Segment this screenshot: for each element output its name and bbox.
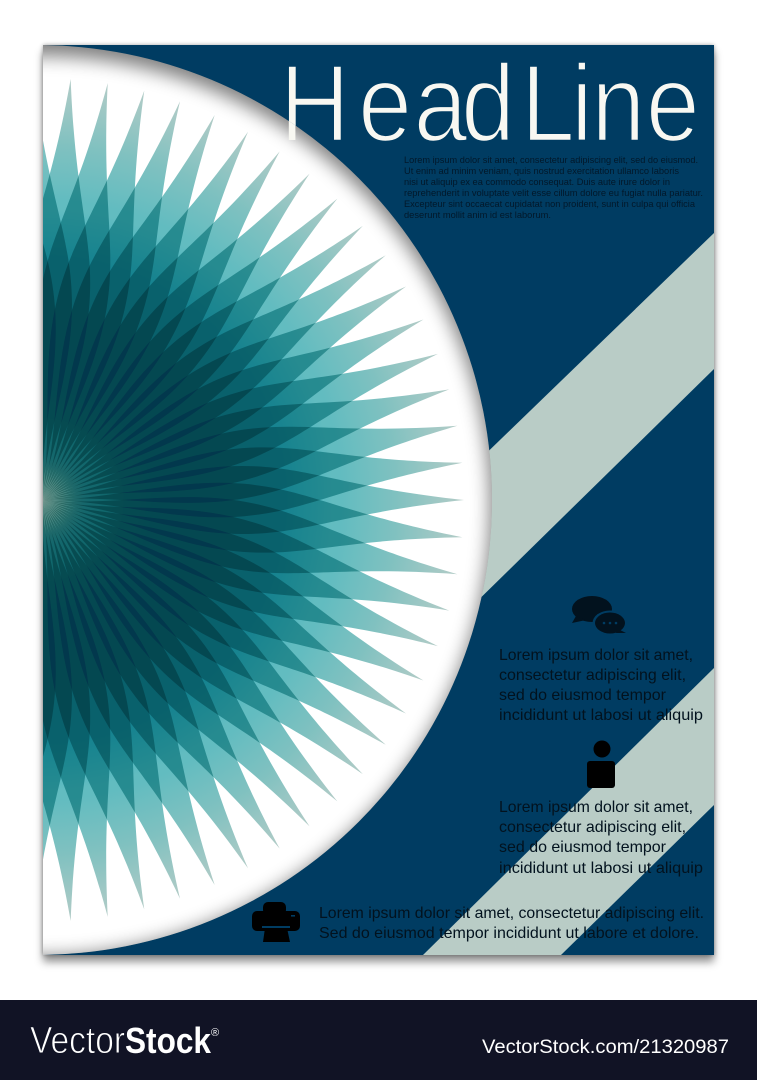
intro paragraph bbox=[404, 155, 703, 221]
text block: bottom feature: Sed do eiusmod tempor incididunt ut labore et dolore. bbox=[319, 925, 699, 942]
footer image id: VectorStock.com/21320987 bbox=[482, 1036, 729, 1058]
footer logo: Stock bbox=[125, 1020, 212, 1061]
text block: first feature bbox=[499, 647, 703, 724]
footer logo: ® bbox=[211, 1027, 219, 1039]
text block: bottom feature bbox=[319, 905, 704, 942]
intro paragraph: Lorem ipsum dolor sit amet, consectetur adipiscing elit, sed do eiusmod. bbox=[404, 155, 698, 166]
title bbox=[286, 62, 694, 141]
text block: second feature: sed do eiusmod tempor bbox=[499, 839, 667, 856]
text block: first feature: incididunt ut labosi ut aliquip bbox=[499, 707, 703, 724]
intro paragraph: reprehenderit in voluptate velit esse cillum dolore eu fugiat nulla pariatur. bbox=[404, 188, 703, 199]
text block: bottom feature: Lorem ipsum dolor sit amet, consectetur adipiscing elit. bbox=[319, 905, 704, 922]
text block: second feature: consectetur adipiscing elit, bbox=[499, 819, 686, 836]
text block: first feature: Lorem ipsum dolor sit amet, bbox=[499, 647, 693, 664]
icon: person bbox=[587, 740, 615, 788]
text block: second feature: Lorem ipsum dolor sit amet, bbox=[499, 799, 693, 816]
text block: first feature: sed do eiusmod tempor bbox=[499, 687, 667, 704]
text block: second feature: incididunt ut labosi ut aliquip bbox=[499, 860, 703, 877]
radial starburst bbox=[43, 80, 464, 920]
icon: printer bbox=[252, 902, 300, 942]
intro paragraph: nisi ut aliquip ex ea commodo consequat. Duis aute irure dolor in bbox=[404, 177, 670, 188]
page background panel bbox=[43, 45, 714, 955]
diagonal stripes bbox=[423, 233, 714, 955]
icon: chat bubbles bbox=[572, 596, 628, 636]
footer logo bbox=[30, 1020, 219, 1062]
footer bar bbox=[0, 1000, 757, 1080]
title: HeadLine bbox=[280, 41, 700, 164]
text block: second feature bbox=[499, 799, 703, 877]
text block: first feature: consectetur adipiscing elit, bbox=[499, 667, 686, 684]
footer logo: Vector bbox=[30, 1020, 125, 1062]
intro paragraph: Excepteur sint occaecat cupidatat non proident, sunt in culpa qui officia bbox=[404, 199, 696, 210]
white half-circle panel bbox=[0, 45, 492, 956]
intro paragraph: deserunt mollit anim id est laborum. bbox=[404, 210, 551, 221]
intro paragraph: Ut enim ad minim veniam, quis nostrud exercitation ullamco laboris bbox=[404, 166, 679, 177]
